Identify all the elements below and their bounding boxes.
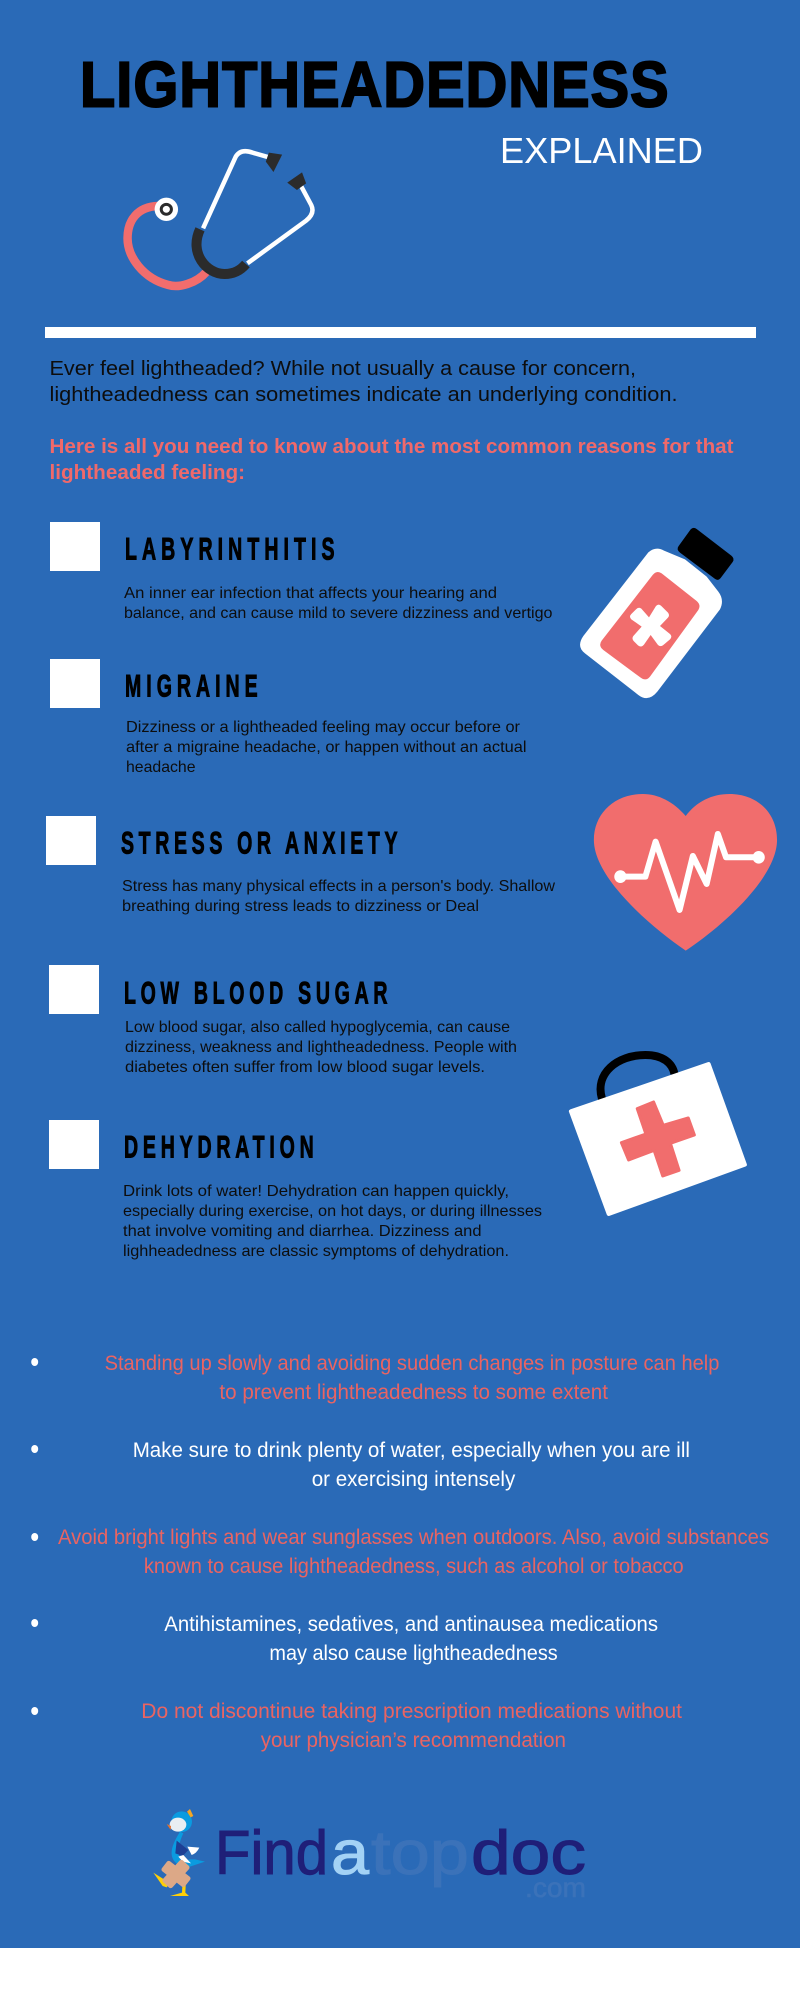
description: diabetes often suffer from low blood sugar levels. xyxy=(125,1059,485,1076)
panel: low blood sugar xyxy=(49,965,517,1076)
title: LIGHTHEADEDNESS xyxy=(80,49,669,120)
description: dizziness, weakness and lightheadedness. People with xyxy=(125,1039,517,1056)
bullet list xyxy=(31,1351,769,1752)
tip 5 xyxy=(31,1699,682,1752)
panel: dehydration xyxy=(49,1120,542,1260)
wordmark: top xyxy=(371,1819,469,1888)
description: Drink lots of water! Dehydration can happen quickly, xyxy=(123,1183,509,1200)
tip 3: Avoid bright lights and wear sunglasses when outdoors. Also, avoid substances xyxy=(58,1525,769,1549)
icon: penguin mascot xyxy=(153,1809,205,1896)
tip 2 xyxy=(31,1438,690,1491)
description xyxy=(123,1183,542,1260)
icon: heart with pulse xyxy=(594,794,777,951)
tip 3 xyxy=(31,1525,769,1578)
description: Stress has many physical effects in a person's body. Shallow xyxy=(122,878,555,895)
description: after a migraine headache, or happen without an actual xyxy=(126,739,526,756)
panel: labyrinthitis xyxy=(50,522,553,622)
wordmark: Find xyxy=(215,1819,328,1888)
checkbox xyxy=(49,1120,99,1169)
description xyxy=(126,719,526,776)
tip 1 xyxy=(31,1351,719,1404)
description: lighheadedness are classic symptoms of dehydration. xyxy=(123,1243,509,1260)
tip 5: Do not discontinue taking prescription medications without xyxy=(141,1699,682,1723)
heading: LABYRINTHITIS xyxy=(125,531,335,567)
divider bar xyxy=(45,327,756,338)
intro text: lightheadedness can sometimes indicate an underlying condition. xyxy=(50,383,678,406)
highlighted intro text: Here is all you need to know about the most common reasons for that xyxy=(50,435,734,458)
checkbox xyxy=(49,965,99,1014)
wordmark: a xyxy=(331,1819,370,1888)
tip 2: or exercising intensely xyxy=(312,1467,516,1491)
description: that involve vomiting and diarrhea. Dizziness and xyxy=(123,1223,482,1240)
heading: DEHYDRATION xyxy=(124,1129,314,1165)
icon: first aid kit xyxy=(571,1055,745,1214)
description xyxy=(122,878,555,915)
description: headache xyxy=(126,759,196,776)
tip 4: may also cause lightheadedness xyxy=(269,1641,558,1665)
description: Dizziness or a lightheaded feeling may occur before or xyxy=(126,719,521,736)
heading: STRESS OR ANXIETY xyxy=(121,825,398,861)
logo xyxy=(153,1809,586,1903)
heading: MIGRAINE xyxy=(125,668,258,704)
description: breathing during stress leads to dizziness or Deal xyxy=(122,898,479,915)
tip 3: known to cause lightheadedness, such as alcohol or tobacco xyxy=(144,1554,684,1578)
description: balance, and can cause mild to severe dizziness and vertigo xyxy=(124,605,553,622)
intro text xyxy=(50,357,678,406)
tip 4: Antihistamines, sedatives, and antinausea medications xyxy=(164,1612,658,1636)
intro text: Ever feel lightheaded? While not usually a cause for concern, xyxy=(50,357,636,380)
wordmark: doc xyxy=(471,1819,586,1888)
wordmark xyxy=(215,1819,586,1888)
tip 1: to prevent lightheadedness to some extent xyxy=(219,1380,608,1404)
description: Low blood sugar, also called hypoglycemia, can cause xyxy=(125,1019,510,1036)
panel: stress or anxiety xyxy=(46,816,555,915)
description: especially during exercise, on hot days, or during illnesses xyxy=(123,1203,542,1220)
heading: LOW BLOOD SUGAR xyxy=(124,975,388,1011)
subtitle: EXPLAINED xyxy=(500,130,703,171)
panel: migraine xyxy=(50,659,526,776)
tip 2: Make sure to drink plenty of water, especially when you are ill xyxy=(133,1438,690,1462)
tip 1: Standing up slowly and avoiding sudden changes in posture can help xyxy=(105,1351,719,1375)
description xyxy=(124,585,553,622)
highlighted intro text: lightheaded feeling: xyxy=(50,461,245,484)
tip 5: your physician’s recommendation xyxy=(261,1728,566,1752)
checkbox xyxy=(50,522,100,571)
wordmark domain: .com xyxy=(525,1872,586,1903)
tip 4 xyxy=(31,1612,658,1665)
icon: stethoscope xyxy=(128,151,312,286)
icon: medicine bottle xyxy=(580,528,734,698)
description: An inner ear infection that affects your hearing and xyxy=(124,585,497,602)
highlighted intro text xyxy=(50,435,734,484)
checkbox xyxy=(46,816,96,865)
description xyxy=(125,1019,517,1076)
checkbox xyxy=(50,659,100,708)
